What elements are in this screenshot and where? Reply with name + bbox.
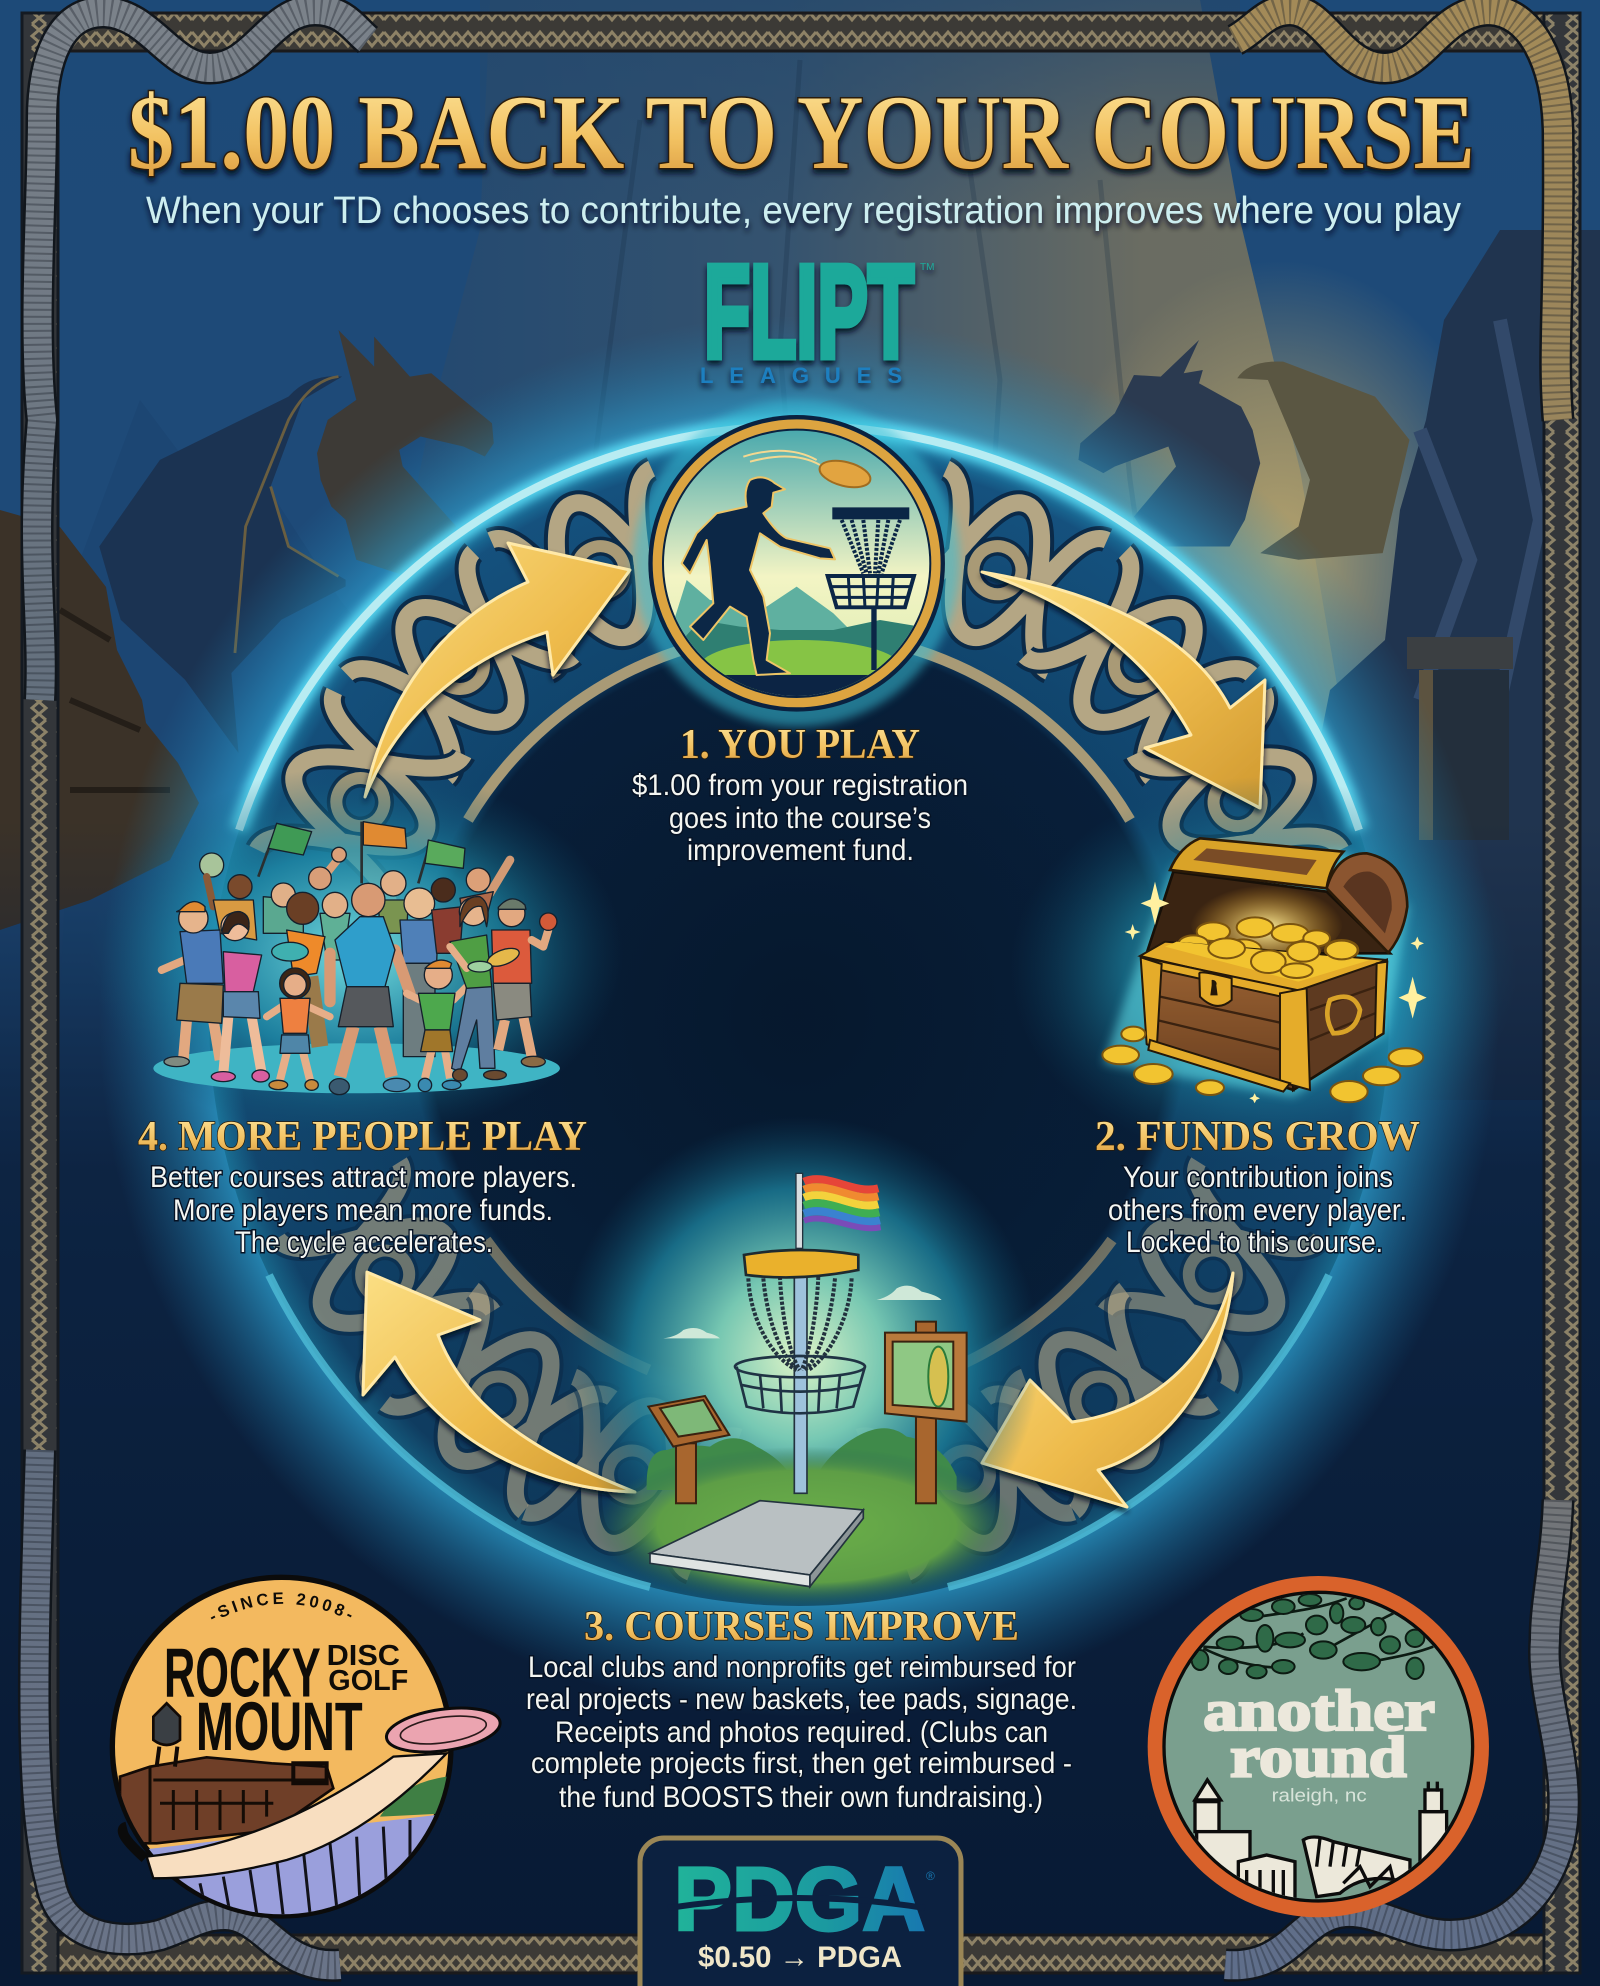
flags: [258, 822, 465, 883]
step 1 label: [632, 722, 968, 867]
boy in green: [407, 960, 467, 1092]
step 4 label: [138, 1114, 587, 1259]
woman in green: [450, 897, 506, 1081]
trees: [647, 1428, 957, 1490]
dragon right: [1078, 340, 1409, 560]
waterfall: [149, 1815, 435, 1914]
grass: [593, 1447, 1020, 1607]
step 3 label: 3. COURSES IMPROVE: [584, 1604, 1019, 1650]
oak branches: [1192, 1594, 1433, 1679]
FLIPT Leagues logo: [700, 238, 934, 388]
skyline: [1195, 1780, 1447, 1903]
dragon left: [99, 330, 494, 753]
disc golf basket: [828, 508, 914, 670]
step 2 label: Your contribution joins: [1123, 1161, 1393, 1194]
PDGA contribution badge: PDGA: [674, 1850, 925, 1950]
step 3 label: [526, 1604, 1077, 1814]
player silhouette: [682, 477, 835, 675]
arrow: people to play: [365, 543, 630, 797]
loose coins: [1102, 1027, 1423, 1102]
sign left: [648, 1396, 729, 1503]
clouds: [663, 1286, 942, 1338]
man in blue shirt: [162, 902, 223, 1067]
tee pad: [650, 1501, 863, 1587]
Rocky Mount Disc Golf logo: GOLF: [328, 1665, 408, 1697]
cliff right: [1290, 230, 1600, 1100]
flying disc: [384, 1702, 503, 1758]
rocks left: [0, 510, 199, 930]
Another Round Raleigh logo: another: [1203, 1678, 1435, 1743]
Rocky Mount Disc Golf logo: -SINCE 2008-: [210, 1592, 352, 1620]
Rocky Mount Disc Golf logo: MOUNT: [196, 1689, 363, 1765]
man in red: [468, 899, 557, 1067]
snake: right and bottom: [1225, 10, 1564, 1965]
Rocky Mount Disc Golf logo: DISC: [327, 1640, 400, 1672]
step 3 label: real projects - new baskets, tee pads, signage.: [526, 1683, 1077, 1716]
step 3 label: Receipts and photos required. (Clubs can: [555, 1716, 1048, 1749]
step 3 label: the fund BOOSTS their own fundraising.): [559, 1781, 1043, 1814]
subtitle: When your TD chooses to contribute, every registration improves where you play: [146, 190, 1461, 232]
step 1 label: 1. YOU PLAY: [680, 722, 920, 768]
stone pillar: [1407, 637, 1513, 840]
girl in orange: [267, 968, 330, 1090]
Rocky Mount Disc Golf logo: ROCKY: [164, 1634, 321, 1712]
step 2 label: 2. FUNDS GROW: [1095, 1114, 1420, 1160]
arrow: play to funds: [982, 572, 1265, 808]
FLIPT Leagues logo: LEAGUES: [700, 363, 902, 388]
step 1 label: goes into the course’s: [669, 802, 931, 835]
chest body: [1142, 957, 1293, 1090]
basket: [735, 1173, 881, 1493]
Rocky Mount Disc Golf logo: [110, 1574, 502, 1919]
step 2 label: Locked to this course.: [1126, 1226, 1383, 1259]
step 4 label: 4. MORE PEOPLE PLAY: [138, 1114, 587, 1160]
step 3 label: Local clubs and nonprofits get reimbursed for: [528, 1651, 1076, 1684]
step 1 label: $1.00 from your registration: [632, 769, 968, 802]
Another Round Raleigh logo: round: [1230, 1725, 1407, 1790]
step 1 label: improvement fund.: [687, 834, 914, 867]
ribbon behind orbit: [123, 1827, 145, 1858]
sparkles: [1125, 882, 1427, 1103]
FLIPT Leagues logo: TM: [920, 262, 934, 273]
arrows: cycle direction: [363, 543, 1265, 1507]
coin pile: [1178, 917, 1358, 978]
PDGA contribution badge: ®: [926, 1869, 935, 1883]
PDGA contribution badge: [640, 1838, 961, 1986]
step 2 label: [1095, 1114, 1420, 1259]
step 4 label: Better courses attract more players.: [150, 1161, 577, 1194]
water tower: [157, 1747, 177, 1767]
step 3 illustration: improved course: [560, 1117, 1040, 1607]
snake: left and top: [34, 10, 368, 1965]
sign right: [885, 1322, 967, 1503]
lid: [1170, 838, 1343, 888]
mill building: [120, 1757, 333, 1843]
Another Round Raleigh logo: [1148, 1576, 1489, 1917]
step 4 illustration: group of players: [90, 767, 623, 1140]
step 4 label: The cycle accelerates.: [235, 1226, 493, 1259]
step 2 illustration: treasure chest: [1010, 777, 1517, 1163]
step 2 label: others from every player.: [1108, 1194, 1407, 1227]
glowing ring with celtic knot band: [99, 316, 1499, 1716]
step 3 label: complete projects first, then get reimbursed -: [531, 1747, 1072, 1780]
step 1 medallion: player throwing: [633, 400, 960, 727]
Another Round Raleigh logo: raleigh, nc: [1272, 1785, 1367, 1806]
PDGA contribution badge: $0.50 → PDGA: [698, 1941, 902, 1974]
woman in pink: [211, 912, 269, 1082]
arrow: funds to courses: [982, 1273, 1233, 1507]
man in centre blue polo: [329, 883, 410, 1095]
arrow: courses to people: [363, 1272, 635, 1492]
FLIPT Leagues logo: FLIPT: [704, 238, 914, 385]
back row: [200, 847, 510, 1057]
step 4 label: More players mean more funds.: [173, 1194, 553, 1227]
